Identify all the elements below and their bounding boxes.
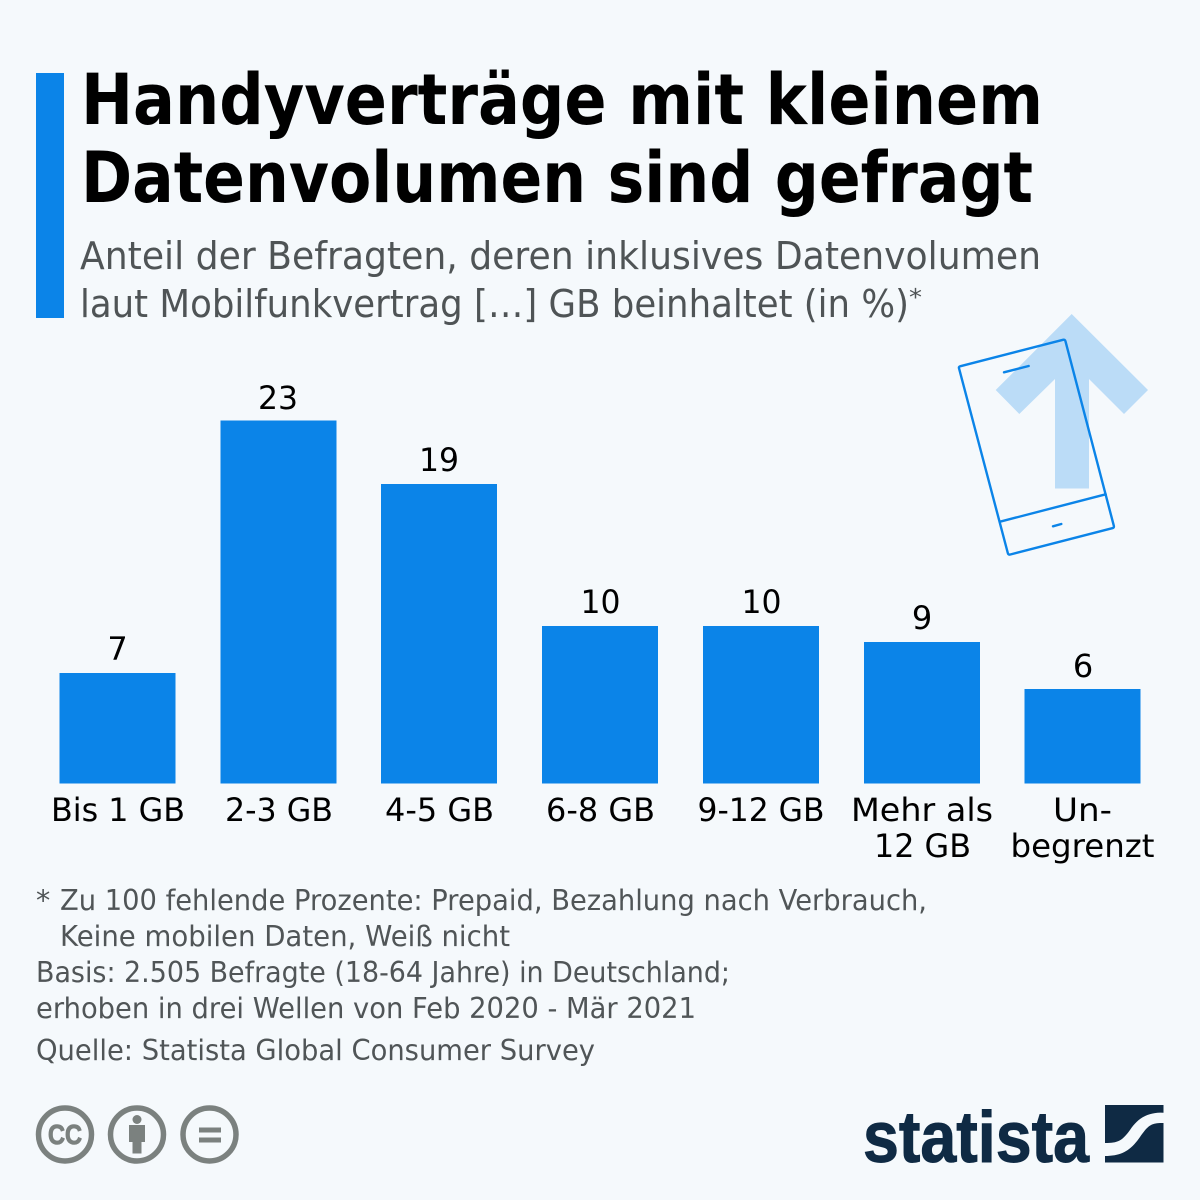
bar chart <box>51 379 1154 865</box>
bar: Mehr als 12 GB <box>851 599 993 865</box>
accent bar <box>36 73 64 318</box>
subtitle: * <box>909 285 922 311</box>
subtitle: laut Mobilfunkvertrag […] GB beinhaltet (in %) <box>80 282 909 326</box>
bar: 6-8 GB: 6-8 GB <box>546 791 655 829</box>
bar: 9-12 GB: 10 <box>742 583 782 621</box>
logo mark <box>1105 1105 1164 1162</box>
title: Handyverträge mit kleinem <box>81 59 1043 141</box>
bar: 2-3 GB: 23 <box>258 379 298 417</box>
bar: 9-12 GB <box>698 583 824 829</box>
bar: Unbegrenzt <box>1010 647 1154 865</box>
bar: Mehr als 12 GB: 9 <box>912 599 932 637</box>
bar: Unbegrenzt: Un- <box>1053 791 1112 829</box>
footnote and source <box>36 884 927 1067</box>
footnote and source: erhoben in drei Wellen von Feb 2020 - Mär 2021 <box>36 992 696 1025</box>
footnote and source: * <box>36 884 50 917</box>
footnote and source: Basis: 2.505 Befragte (18-64 Jahre) in Deutschland; <box>36 956 730 989</box>
icon: creative commons licence <box>38 1108 236 1161</box>
bar: Bis 1 GB: 7 <box>107 630 128 668</box>
footnote and source: Quelle: Statista Global Consumer Survey <box>36 1034 595 1067</box>
bar: Unbegrenzt: begrenzt <box>1010 827 1154 865</box>
icon: creative commons licence: CC <box>48 1119 82 1150</box>
bar: Bis 1 GB: Bis 1 GB <box>51 791 185 829</box>
subtitle: Anteil der Befragten, deren inklusives Datenvolumen <box>80 234 1041 278</box>
bar: 2-3 GB: 2-3 GB <box>225 791 333 829</box>
bar: 9-12 GB: 9-12 GB <box>698 791 824 829</box>
bar: Mehr als 12 GB: 12 GB <box>874 827 971 865</box>
subtitle <box>80 234 1041 326</box>
footnote and source: Zu 100 fehlende Prozente: Prepaid, Bezahlung nach Verbrauch, <box>60 884 927 917</box>
bar: 4-5 GB: 4-5 GB <box>385 791 494 829</box>
bar: 6-8 GB <box>542 583 658 829</box>
title <box>81 59 1043 219</box>
bar: Bis 1 GB <box>51 630 185 829</box>
bar: Unbegrenzt: 6 <box>1073 647 1093 685</box>
icon: upward arrow behind phone <box>996 314 1148 488</box>
bar: 4-5 GB: 19 <box>419 441 459 479</box>
footnote and source: Keine mobilen Daten, Weiß nicht <box>60 920 510 953</box>
title: Datenvolumen sind gefragt <box>81 137 1033 219</box>
bar: Mehr als 12 GB: Mehr als <box>851 791 993 829</box>
icon: smartphone <box>959 340 1114 555</box>
bar: 6-8 GB: 10 <box>580 583 620 621</box>
logo: statista: statista <box>863 1098 1090 1178</box>
bar: 2-3 GB <box>220 379 336 829</box>
bar: 4-5 GB <box>381 441 497 829</box>
